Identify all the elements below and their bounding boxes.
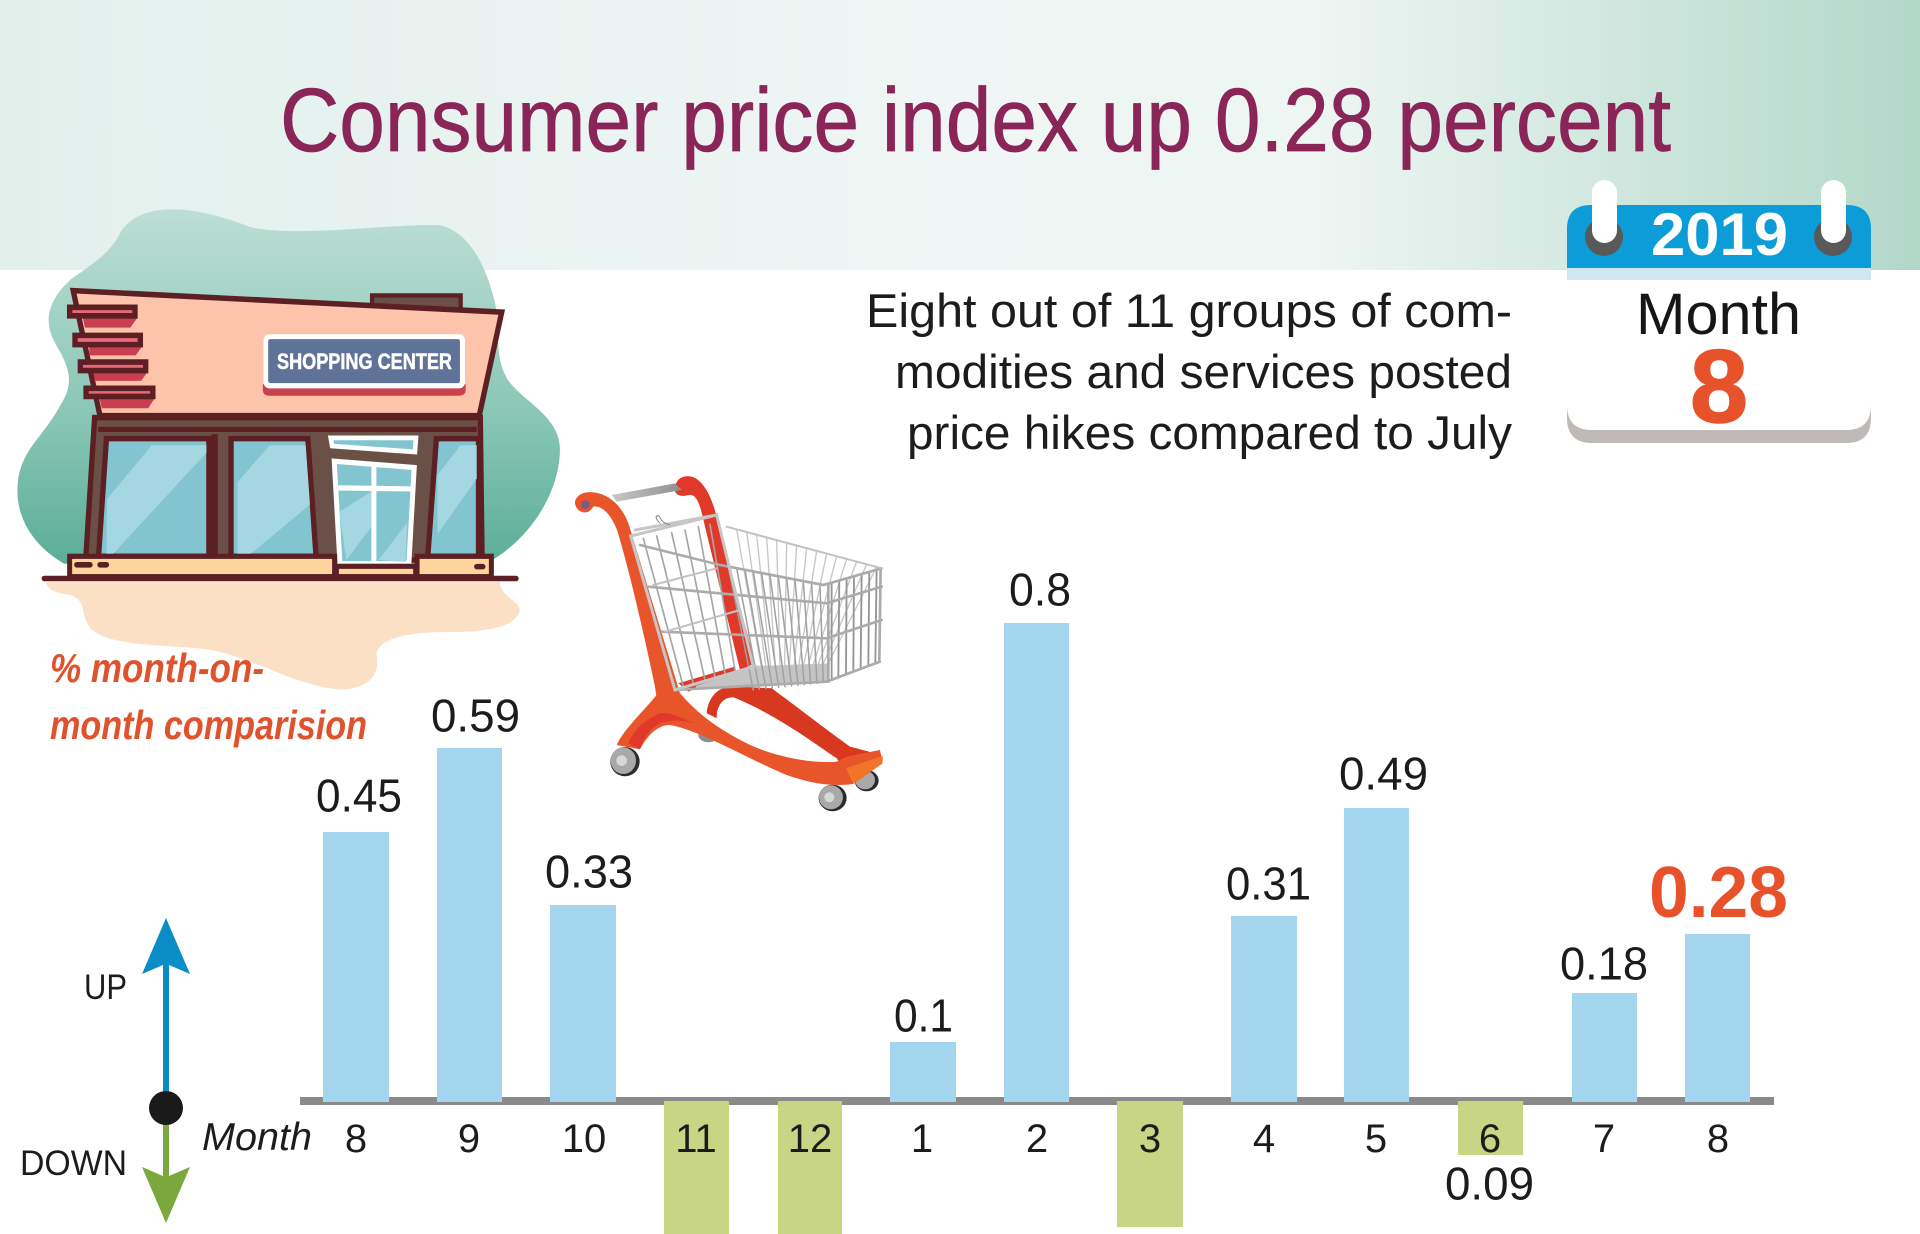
calendar light stripe	[1567, 268, 1871, 280]
month axis labels: 12	[788, 1117, 832, 1161]
calendar	[1567, 180, 1871, 445]
bar values: 0.49	[1339, 748, 1428, 800]
up label: UP	[84, 968, 127, 1007]
rear frame	[707, 686, 882, 777]
basket floor	[693, 663, 830, 688]
month axis labels: 2	[1026, 1117, 1048, 1161]
legend: up and down arrows	[20, 918, 190, 1223]
description text: modities and services posted	[895, 345, 1512, 398]
outer side wires	[728, 567, 823, 690]
door	[334, 461, 414, 564]
bar values: 0.45	[316, 770, 402, 822]
roof	[73, 291, 502, 416]
handle cap	[581, 500, 590, 509]
highlighted value: 0.28	[1649, 853, 1788, 933]
main frame base	[617, 693, 883, 785]
bar values: 0.59	[431, 690, 520, 742]
bar values: 0.33	[545, 846, 633, 898]
month axis labels: 1	[911, 1117, 933, 1161]
front panel wires	[643, 524, 735, 687]
month axis labels	[345, 1117, 1729, 1161]
inner side wires	[737, 529, 877, 667]
door awning	[331, 438, 416, 452]
illustration: shopping center	[17, 209, 560, 690]
window middle	[231, 439, 316, 556]
positive bars	[323, 623, 1750, 1102]
bar values	[316, 564, 1648, 1210]
negative bars	[664, 1101, 1523, 1234]
end panel wires	[832, 570, 877, 679]
description text: Eight out of 11 groups of com-	[866, 284, 1512, 337]
ground blob	[46, 582, 520, 690]
nose of frame	[846, 756, 883, 784]
chart caption: month comparision	[50, 702, 367, 748]
panel floor bar	[678, 667, 737, 692]
main frame post	[575, 492, 680, 698]
month axis labels: 4	[1253, 1117, 1275, 1161]
fascia band	[98, 427, 477, 432]
month axis labels: 11	[675, 1117, 717, 1161]
axis title: Month	[202, 1116, 312, 1159]
bar values: 0.1	[894, 990, 953, 1042]
month axis labels: 9	[458, 1117, 480, 1161]
window right	[428, 439, 479, 556]
roof slats	[70, 307, 155, 408]
building body	[86, 418, 482, 560]
header band	[0, 0, 1920, 270]
description text	[866, 284, 1512, 459]
bar chart	[202, 564, 1788, 1234]
window left	[99, 439, 209, 556]
chart caption	[50, 645, 367, 748]
sign label: SHOPPING CENTER	[277, 349, 452, 374]
front ledge	[70, 556, 491, 577]
month axis labels: 5	[1365, 1117, 1387, 1161]
bar values: 0.09	[1445, 1158, 1534, 1210]
calendar month number: 8	[1690, 329, 1748, 445]
sign	[263, 334, 466, 396]
basket rails	[640, 545, 882, 690]
down label: DOWN	[20, 1144, 127, 1183]
handle bar	[612, 483, 682, 502]
bar values: 0.31	[1226, 858, 1311, 910]
background blob	[17, 209, 560, 564]
calendar page	[1567, 270, 1871, 430]
axis	[300, 1097, 1774, 1105]
bar values: 0.18	[1560, 938, 1648, 990]
chart caption: % month-on-	[50, 645, 264, 691]
down arrow	[142, 1118, 190, 1223]
calendar header	[1567, 205, 1871, 268]
title: Consumer price index up 0.28 percent	[280, 71, 1671, 171]
calendar year: 2019	[1651, 201, 1788, 268]
ground line and details	[44, 565, 516, 578]
up arrow	[142, 918, 190, 1095]
rear post	[675, 476, 755, 670]
calendar shadow	[1567, 300, 1871, 443]
month axis labels: 10	[562, 1117, 606, 1161]
description text: price hikes compared to July	[907, 406, 1512, 459]
origin dot	[149, 1091, 183, 1125]
pillar between windows	[211, 434, 218, 556]
wheels	[610, 728, 879, 811]
bar values: 0.8	[1009, 564, 1071, 616]
illustration: shopping cart	[575, 476, 883, 811]
front panel frame	[631, 515, 753, 690]
basket	[631, 515, 882, 690]
frame shading	[628, 713, 693, 749]
month axis labels: 8	[345, 1117, 367, 1161]
month axis labels: 8	[1707, 1117, 1729, 1161]
month axis labels: 3	[1139, 1117, 1161, 1161]
calendar rings	[1585, 180, 1852, 256]
hook	[656, 516, 670, 525]
month axis labels: 7	[1593, 1117, 1615, 1161]
calendar month label: Month	[1636, 282, 1801, 347]
month axis labels: 6	[1479, 1117, 1501, 1161]
